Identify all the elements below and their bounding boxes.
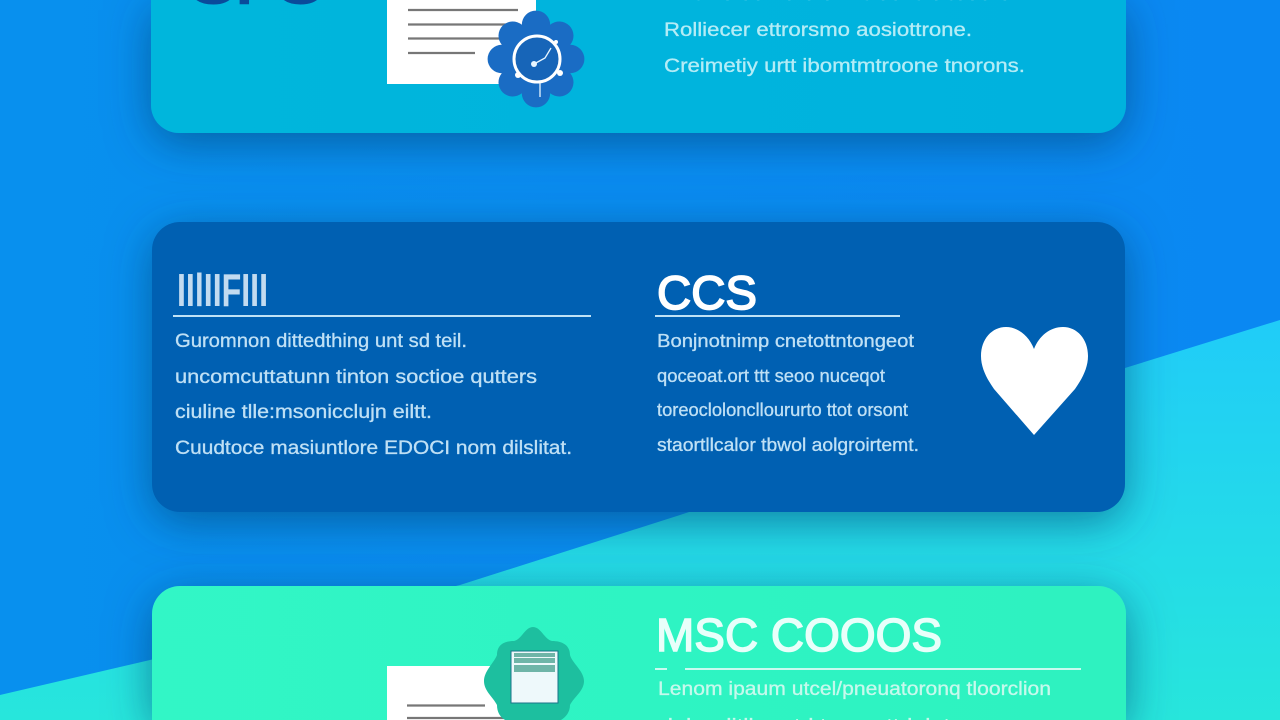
icon: heart [981,327,1088,435]
text block: bottom copy: Lenom ipaum utcel/pneuatoronq tloorclion [658,679,1051,700]
text block: right copy [657,331,919,455]
text block: left copy [175,331,572,459]
text block: left copy: Guromnon dittedthing unt sd teil. [175,331,467,352]
divider: right heading rule [655,315,900,317]
text block: top panel copy: Creimetiy urtt ibomtmtroone tnorons. [664,56,1025,77]
panel: bottom mint [152,586,1126,720]
divider: left heading rule [173,315,591,317]
panel: top cyan [151,0,1126,133]
text block: right copy: toreoclolonclloururto ttot orsont [657,400,908,420]
text block: right copy: Bonjnotnimp cnetottntongeot [657,331,914,351]
text block: top panel copy [664,0,1025,77]
divider: bottom heading rule [655,668,1081,670]
text block: top panel copy: Rolliecer ettrorsmo aosiottrone. [664,20,972,41]
heading: left garbled title: IIlIIFIII [177,264,268,316]
heading: MSC COOOS: MSC COOOS [656,609,942,661]
text block: left copy: Cuudtoce masiuntlore EDOCI nom dilslitat. [175,438,572,459]
text block: right copy: qoceoat.ort ttt seoo nuceqot [657,366,885,386]
icon: document with blue badge [387,0,584,107]
heading: CCS: CCS [657,266,757,319]
icon: blue flower badge [488,11,584,107]
text block: left copy: uncomcuttatunn tinton soctioe qutters [175,367,537,388]
text block: left copy: ciuline tlle:msonicclujn eiltt. [175,402,432,423]
icon: green badge with document [484,627,584,720]
icon: document with green badge [387,627,584,720]
panel: middle dark blue [152,222,1125,512]
text block: bottom copy [658,679,1051,720]
text block: right copy: staortllcalor tbwol aolgroirtemt. [657,435,919,455]
